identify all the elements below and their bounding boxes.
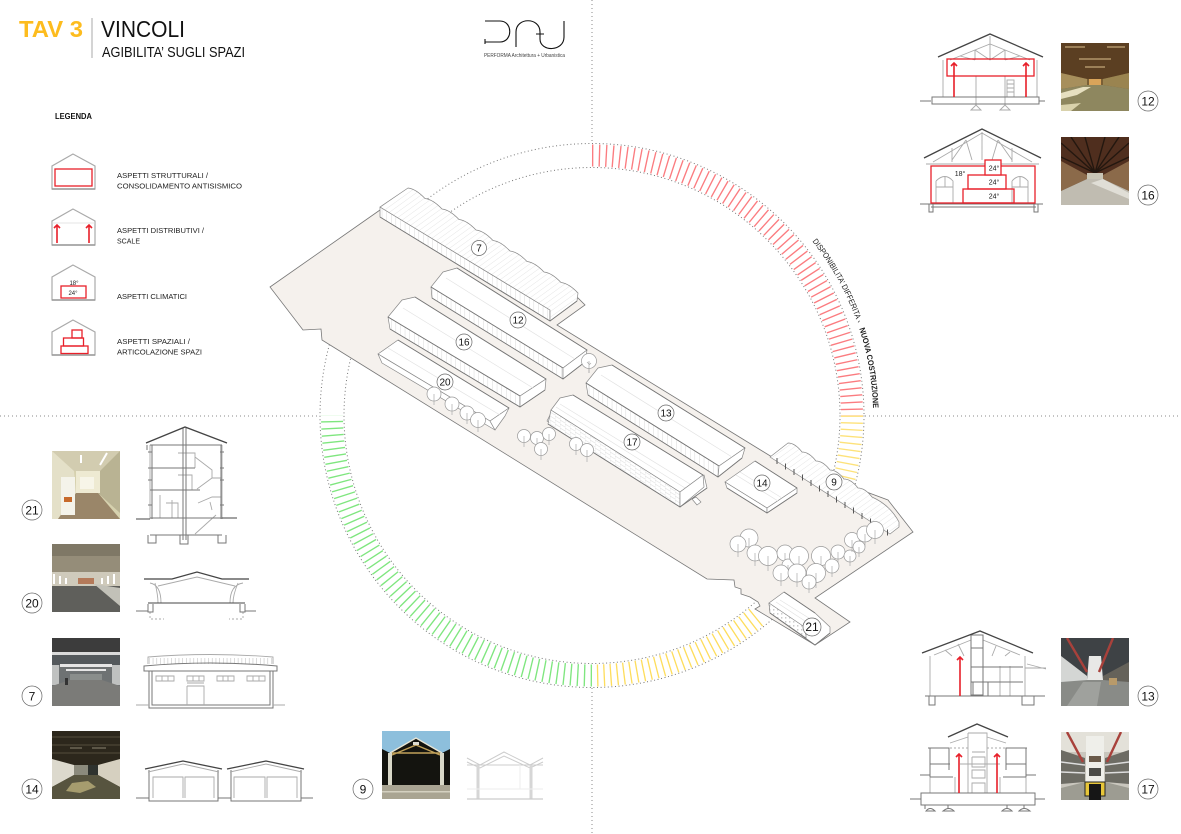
legend — [52, 112, 242, 356]
legend: spatial — [52, 320, 202, 356]
badge 12: 12 — [1141, 94, 1155, 108]
legend: climate — [52, 265, 187, 301]
title: vincoli: VINCOLI — [101, 16, 185, 42]
trees near building 17 — [518, 428, 594, 462]
legend: climate: 24° — [68, 291, 78, 297]
building 20 — [378, 340, 509, 430]
badge 14: 14 — [25, 782, 39, 796]
ring label: nuova costruzione: NUOVA COSTRUZIONE — [859, 327, 879, 408]
badge 9: 9 — [360, 782, 367, 796]
badge 14 — [22, 779, 42, 799]
ring label paths — [812, 241, 873, 409]
badge 16: 16 — [1141, 188, 1155, 202]
building number labels: 7 — [476, 244, 482, 254]
section 14 — [136, 761, 313, 801]
building 14 — [725, 461, 797, 513]
title — [19, 16, 245, 61]
building 12 — [431, 268, 587, 379]
building 7 — [380, 188, 578, 321]
building number labels: 14 — [756, 478, 768, 490]
building 13 — [586, 365, 745, 477]
badge 9 — [353, 779, 373, 799]
section 16: 24° — [989, 164, 999, 172]
legend: climate: ASPETTI CLIMATICI — [117, 292, 187, 301]
logo: PERFORMA Architettura + Urbanistica — [484, 53, 565, 59]
section 12 — [920, 34, 1045, 110]
building number labels: 20 — [439, 378, 451, 388]
legend: spatial: ASPETTI SPAZIALI / — [117, 337, 191, 346]
section 16: 24° — [989, 192, 999, 200]
title: subtitle: AGIBILITA’ SUGLI SPAZI — [102, 44, 245, 61]
photo 9 — [382, 731, 450, 799]
photo 21 — [52, 451, 120, 519]
badge 21: 21 — [25, 504, 39, 518]
building 9 — [770, 443, 899, 536]
photo 13 — [1061, 638, 1129, 706]
trees along building 20 — [427, 387, 486, 432]
badge 17 — [1138, 779, 1158, 799]
yellow ticks: bottom — [597, 614, 760, 676]
badge 20 — [22, 593, 42, 613]
legend: spatial: ARTICOLAZIONE SPAZI — [117, 348, 202, 356]
section 16: 24° — [989, 178, 999, 186]
red ticks: nuova costruzione — [592, 156, 852, 416]
legend: structural: ASPETTI STRUTTURALI / — [117, 171, 209, 180]
tree grove — [730, 522, 884, 593]
section 16: 18° — [955, 170, 965, 178]
logo — [484, 21, 565, 59]
building number labels: 9 — [831, 478, 837, 488]
photo 14 — [52, 731, 120, 799]
building number labels: 17 — [626, 438, 638, 448]
badge 16 — [1138, 185, 1158, 205]
legend: climate: 18° — [69, 281, 79, 287]
section 9 — [467, 752, 543, 799]
section 20 — [136, 572, 256, 619]
building number labels: 21 — [805, 620, 819, 634]
section 7 — [136, 654, 285, 708]
photo 12 — [1061, 43, 1129, 111]
badge 17: 17 — [1141, 782, 1155, 796]
legend: distribution — [52, 209, 205, 246]
section 16 — [920, 129, 1043, 212]
green ticks — [332, 416, 592, 676]
ring label: disponibilita differita: DISPONIBILITA’ DIFFERITA — [812, 238, 860, 320]
legend: structural: CONSOLIDAMENTO ANTISISMICO — [117, 182, 242, 190]
badge 7 — [22, 686, 42, 706]
building number labels: 13 — [660, 408, 672, 420]
legend: structural — [52, 154, 242, 190]
building 17 — [547, 395, 707, 507]
yellow ticks: right — [839, 416, 852, 496]
legend: distribution: SCALE — [117, 236, 140, 246]
building number labels: 16 — [458, 338, 470, 348]
trees near building 12 — [582, 354, 596, 373]
photo 17 — [1061, 732, 1129, 800]
site plan land — [270, 210, 913, 645]
section 17 — [910, 724, 1045, 811]
building number labels — [437, 240, 842, 636]
badge 13: 13 — [1141, 690, 1155, 704]
building 21 — [769, 592, 830, 645]
badge 21 — [22, 500, 42, 520]
legend heading: LEGENDA — [55, 112, 92, 121]
photo 16 — [1061, 137, 1129, 205]
section 13 — [922, 631, 1046, 705]
badge 7: 7 — [29, 690, 36, 704]
availability ring — [320, 144, 864, 688]
photo 20 — [52, 544, 120, 612]
building 16 — [388, 297, 546, 407]
badge 12 — [1138, 91, 1158, 111]
title: tav number: TAV 3 — [19, 16, 83, 42]
badge 13 — [1138, 686, 1158, 706]
badge 20: 20 — [25, 596, 39, 610]
section 21 — [136, 427, 237, 544]
building number labels: 12 — [512, 316, 524, 326]
legend: distribution: ASPETTI DISTRIBUTIVI / — [117, 226, 205, 235]
photo 7 — [52, 638, 120, 706]
